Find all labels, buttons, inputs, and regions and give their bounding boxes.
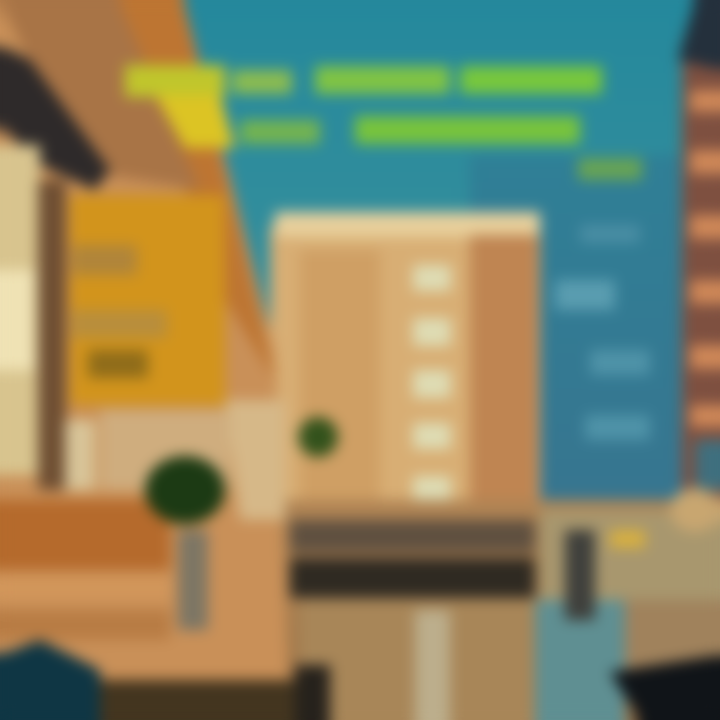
blue building right bbox=[470, 155, 685, 505]
left windows and column bbox=[0, 145, 230, 490]
window column bbox=[413, 265, 451, 502]
left orange terrace bbox=[0, 500, 170, 640]
left building bbox=[0, 0, 290, 720]
dark diagonal beam bbox=[0, 45, 110, 190]
ground and water bbox=[0, 500, 720, 720]
title: blurred headline bbox=[125, 65, 602, 148]
tree large bbox=[145, 456, 225, 524]
yellow sign panel bbox=[70, 195, 225, 405]
dark arcade band bbox=[290, 520, 645, 620]
right edge tower bbox=[670, 0, 720, 532]
centre building bbox=[270, 212, 540, 525]
tree small bbox=[298, 417, 338, 457]
tree trunk bbox=[178, 530, 208, 630]
bottom dark foreground bbox=[0, 640, 720, 720]
small green date label bbox=[578, 158, 642, 180]
